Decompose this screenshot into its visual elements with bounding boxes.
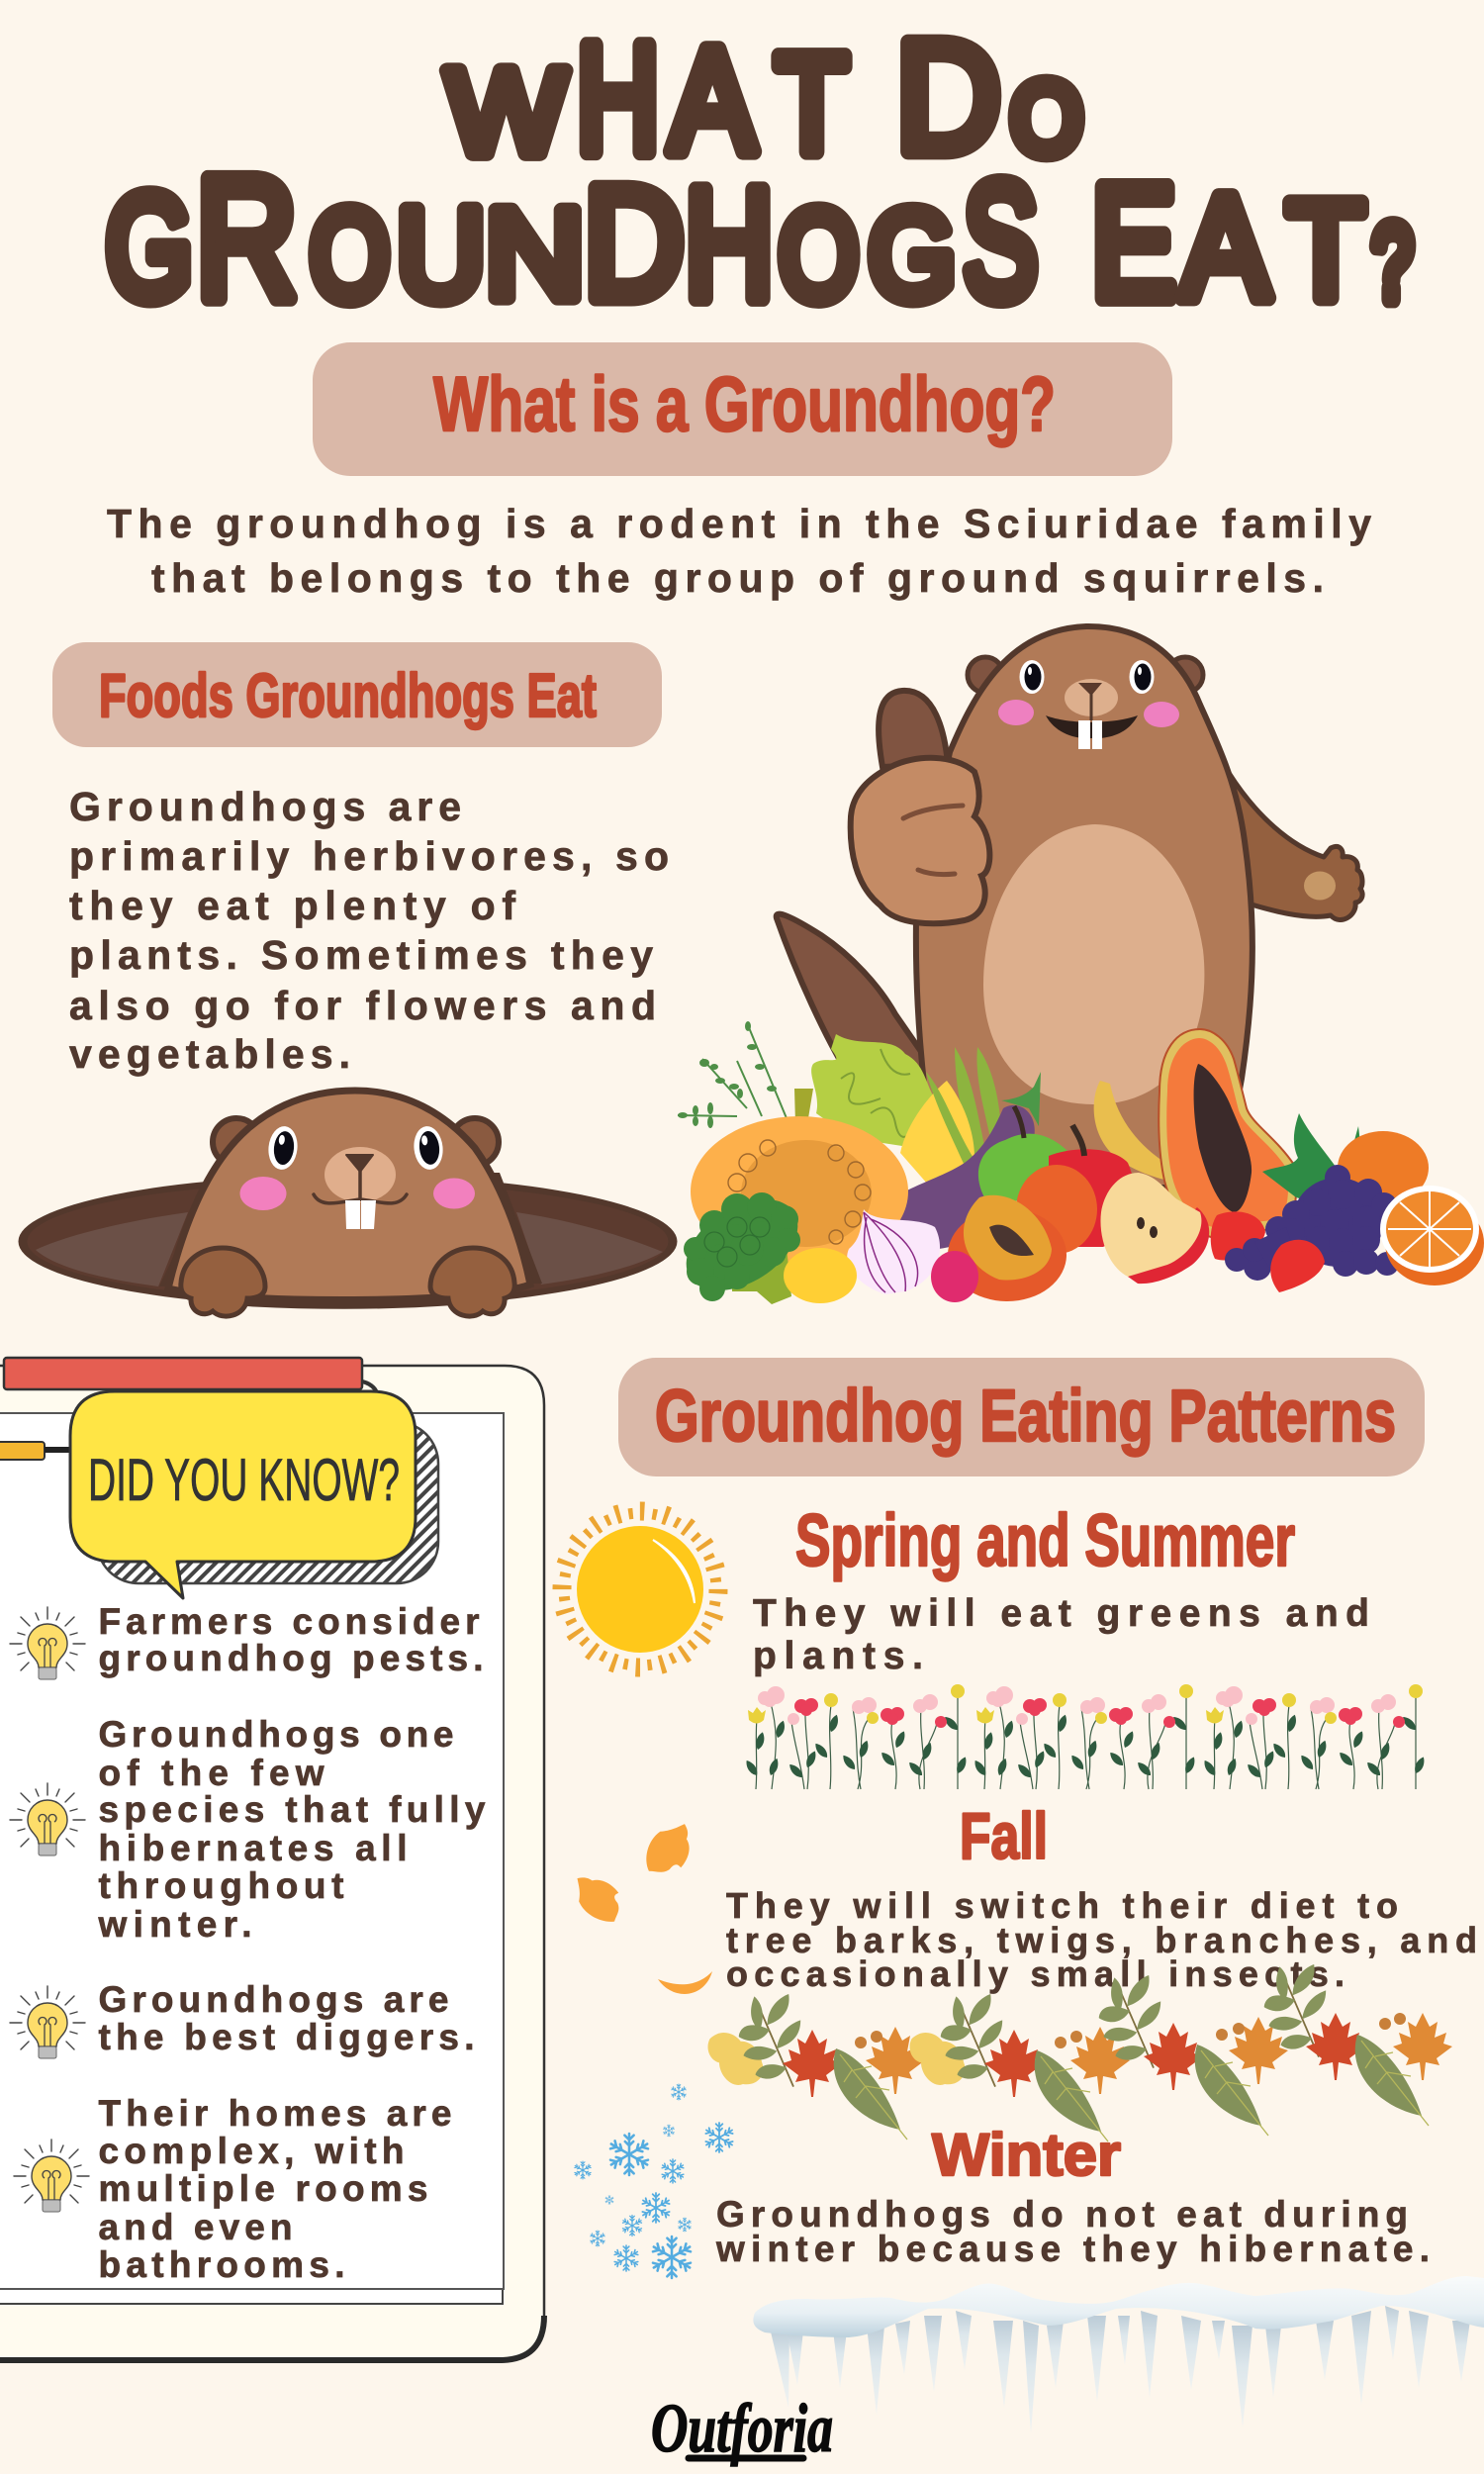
body — [916, 626, 1252, 1188]
fact 2: Groundhogs one — [99, 1714, 453, 1755]
spring and summer text: They will eat greens and — [753, 1592, 1369, 1635]
illustration: standing groundhog thumbs up — [777, 626, 1362, 1188]
logo: Outforia: Outforia — [651, 2391, 833, 2467]
fact 4: Their homes are — [99, 2093, 451, 2134]
fact 1 — [10, 1601, 483, 1679]
heading pill: what is a groundhog — [313, 342, 1172, 476]
apple half — [1128, 1207, 1209, 1284]
title: D — [584, 153, 685, 332]
fall text: tree barks, twigs, branches, and — [726, 1920, 1477, 1960]
tail — [777, 914, 940, 1079]
pink radish — [931, 1251, 978, 1302]
corn — [900, 1081, 974, 1192]
fact 3: the best diggers. — [99, 2017, 475, 2057]
title: A — [1181, 164, 1270, 330]
spring and summer text: plants. — [753, 1635, 923, 1677]
lettuce — [811, 1034, 936, 1148]
clipboard board — [0, 1366, 544, 2360]
fact 4: complex, with — [99, 2131, 404, 2171]
heading: winter: Winter — [932, 2122, 1121, 2188]
intro text — [107, 501, 1371, 601]
grapes — [1225, 1165, 1399, 1281]
fact 1: Farmers consider — [99, 1601, 479, 1642]
title: S — [964, 149, 1038, 333]
herbs — [678, 1025, 787, 1118]
title: ? — [1372, 204, 1413, 322]
foods paragraph: Groundhogs are — [69, 784, 461, 829]
bubble label: DID YOU KNOW? — [88, 1447, 400, 1513]
thumb and fist — [879, 691, 948, 767]
fall text — [726, 1885, 1477, 1994]
intro text: that belongs to the group of ground squirrels. — [151, 555, 1324, 601]
peach half — [948, 1208, 1067, 1301]
title: O — [779, 184, 859, 327]
heading pill: groundhog eating patterns — [618, 1358, 1425, 1476]
heading: fall: Fall — [960, 1799, 1048, 1872]
speech bubble shadow — [97, 1422, 438, 1583]
title: U — [397, 183, 486, 328]
face — [998, 660, 1179, 749]
papaya — [1159, 1029, 1296, 1237]
title: T — [776, 26, 848, 181]
icons: falling leaves — [569, 1824, 712, 1994]
illustration: groundhog peeking out of burrow — [18, 1091, 677, 1316]
foods paragraph — [69, 784, 669, 1077]
title: H — [685, 157, 774, 332]
orange half — [1385, 1200, 1484, 1285]
eggplant — [880, 1105, 1035, 1250]
fact 2: hibernates all — [99, 1828, 408, 1868]
foods paragraph: plants. Sometimes they — [69, 932, 653, 978]
heading: spring and summer: Spring and Summer — [795, 1499, 1295, 1581]
speech bubble — [70, 1391, 416, 1598]
waving arm — [1229, 773, 1362, 920]
strawberry — [1211, 1211, 1265, 1260]
clip tab — [0, 1442, 74, 1460]
ears — [968, 657, 1003, 693]
paper — [0, 1413, 504, 2289]
panel: did you know clipboard — [0, 1358, 544, 2360]
whole orange — [1338, 1131, 1429, 1204]
title: W — [446, 46, 566, 179]
icon: sun — [562, 1511, 718, 1667]
title: R — [196, 142, 298, 334]
foods paragraph: primarily herbivores, so — [69, 833, 669, 879]
fact 2: species that fully — [99, 1789, 486, 1830]
foods paragraph: they eat plenty of — [69, 883, 515, 928]
icons: snowflakes — [574, 2084, 734, 2278]
red apple — [1049, 1149, 1135, 1247]
title: O — [310, 183, 390, 327]
winter text — [715, 2194, 1430, 2269]
fact 4 — [14, 2093, 451, 2285]
fact 2: winter. — [97, 1904, 251, 1945]
illustration: pile of fruits and vegetables — [670, 1021, 1484, 1309]
title: E — [1091, 152, 1176, 333]
asparagus — [955, 1047, 1001, 1163]
illustration: snow and icicles — [753, 2276, 1484, 2434]
banana — [1094, 1081, 1165, 1180]
heading pill: foods groundhogs eat: Foods Groundhogs Eat — [99, 662, 597, 730]
fact 4: multiple rooms — [99, 2168, 427, 2209]
title: D — [896, 8, 1001, 185]
fall text: occasionally small insects. — [726, 1953, 1345, 1994]
fall text: They will switch their diet to — [726, 1885, 1398, 1926]
winter text: winter because they hibernate. — [715, 2229, 1430, 2269]
lemon — [784, 1248, 857, 1303]
title: H — [577, 12, 659, 184]
foods paragraph: also go for flowers and — [69, 983, 656, 1028]
foods paragraph: vegetables. — [69, 1031, 350, 1077]
fact 4: and even — [99, 2207, 293, 2247]
belly — [983, 824, 1204, 1104]
leaves — [1262, 1113, 1363, 1200]
illustration: row of flowers — [744, 1684, 1428, 1789]
winter text: Groundhogs do not eat during — [716, 2194, 1408, 2235]
heading pill: what is a groundhog: What is a Groundhog? — [433, 360, 1056, 447]
title: G — [106, 165, 193, 331]
title — [106, 8, 1413, 334]
title: A — [670, 17, 756, 183]
spring and summer text — [753, 1592, 1369, 1677]
illustration: autumn leaf garland — [708, 1964, 1452, 2141]
fact 2: of the few — [99, 1753, 325, 1793]
broccoli — [732, 1247, 791, 1304]
title: T — [1287, 173, 1364, 328]
clip bar — [4, 1358, 362, 1389]
onion — [847, 1209, 940, 1294]
fact 1: groundhog pests. — [99, 1638, 483, 1678]
fact 3 — [10, 1979, 475, 2058]
intro text: The groundhog is a rodent in the Sciuridae family — [107, 501, 1371, 546]
peach — [1016, 1165, 1097, 1254]
title: G — [869, 185, 956, 327]
title: O — [1011, 61, 1082, 175]
fact 4: bathrooms. — [99, 2244, 344, 2285]
heading pill: foods groundhogs eat — [52, 642, 662, 747]
fact 3: Groundhogs are — [99, 1979, 449, 2020]
fact 2: throughout — [99, 1865, 344, 1906]
fact 2 — [10, 1714, 486, 1945]
pumpkin — [794, 1089, 813, 1124]
green apple — [978, 1134, 1067, 1202]
title: N — [485, 183, 585, 326]
